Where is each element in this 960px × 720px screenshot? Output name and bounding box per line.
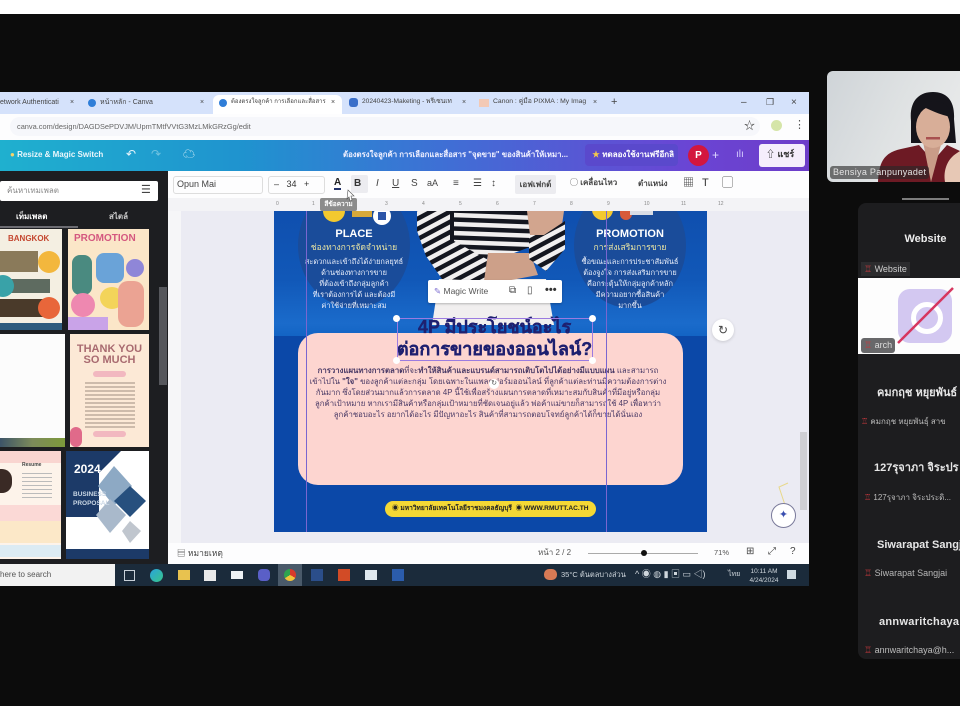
canva top bar [0, 140, 809, 171]
canva top bar: ⇧ แชร์ [766, 149, 794, 159]
top ruler: 3 [385, 201, 388, 207]
name tag: ♖ annwaritchaya@h... [864, 645, 954, 655]
assistant button [771, 503, 796, 528]
top ruler [168, 198, 809, 211]
text toolbar: – 34 + [274, 179, 309, 189]
sidebar: ☰ [141, 184, 151, 196]
promotion body: มีความอยากซื้อสินค้า [596, 290, 664, 299]
star: ☆ [744, 120, 755, 132]
text toolbar: B [354, 178, 361, 189]
text toolbar: ≡ [453, 178, 459, 189]
browser window [0, 92, 809, 586]
try free [585, 144, 678, 166]
body text: เข้าไปใน "ใจ" ของลูกค้าแต่ละกลุ่ม โดยเฉพาะในแพลตฟอร์มออนไลน์ ที่ลูกค้าแต่ละท่านมีความต้องการต่าง [310, 377, 666, 386]
clock [750, 568, 778, 584]
active chrome [278, 564, 302, 586]
thumb: promotion: PROMOTION [74, 233, 136, 244]
place body: ค่าใช้จ่ายที่เหมาะสม [321, 301, 387, 310]
top ruler: 5 [459, 201, 462, 207]
thumb: resume: Resume [22, 462, 41, 468]
name tag: ♖ คมกฤช หยุยพันธุ์ สาข [861, 417, 946, 426]
promotion body [582, 256, 678, 310]
tooltip: สีข้อความ [324, 201, 353, 208]
mouse cursor [346, 190, 355, 202]
footer pill [385, 501, 596, 517]
notification [787, 570, 796, 579]
name tag: ♖ Siwarapat Sangjai [864, 568, 947, 578]
tab icons [88, 99, 96, 107]
tab titles: × [791, 97, 797, 108]
tab titles: × [70, 99, 74, 106]
footer bar [168, 543, 809, 564]
participant: search tile [858, 278, 960, 354]
body text: การวางแผนทางการตลาดที่จะทำให้สินค้าและแบรนด์สามารถเติบโตไปได้อย่างมีแบบแผน และสามารถ [318, 366, 658, 375]
promotion body: ซื้อขณะและการประชาสัมพันธ์ [582, 257, 678, 266]
promotion body: ต้องจูงใจ การส่งเสริมการขาย [583, 268, 677, 277]
upper gradient [274, 211, 707, 336]
search box [0, 181, 158, 201]
participant: website [861, 233, 946, 276]
footer text: ◉ มหาวิทยาลัยเทคโนโลยีราชมงคลธัญบุรี ◉ WWW.RMUTT.AC.TH [392, 505, 588, 512]
taskbar: 35°C ต้นตลบางส่วน [561, 570, 626, 579]
participant: kamonkrit: คมกฤช หยุยพันธ์ [877, 387, 957, 399]
title: ต่อการขายของออนไลน์? [397, 338, 592, 358]
title [397, 316, 592, 358]
tab titles: × [331, 99, 335, 106]
selection guides [306, 211, 607, 532]
canva top bar: + [712, 148, 719, 162]
top ruler: 12 [718, 201, 724, 207]
thumb: resume [0, 451, 61, 559]
text toolbar: T [702, 177, 709, 189]
selection handles [393, 315, 400, 322]
magic write toolbar: ••• [545, 284, 557, 296]
taskbar apps [124, 570, 135, 581]
place body: ที่เราต้องการได้ และต้องมี [313, 290, 395, 299]
place body: ที่ต้องเข้าถึงกลุ่มลูกค้า [319, 279, 389, 288]
place heading: PLACE [335, 228, 373, 240]
animate button: ◯ เคลื่อนไหว [570, 178, 617, 187]
thumb: 2024 business proposal: 2024 [74, 462, 101, 476]
name tag: ♖ 127รุจาภา จิระประดิ... [864, 493, 951, 502]
share button [759, 144, 805, 167]
panel: promotion [574, 211, 686, 310]
text toolbar [168, 171, 809, 198]
page scrollbar [800, 432, 807, 510]
tab titles: ❐ [766, 97, 774, 107]
refresh button [712, 319, 734, 341]
panel: place [298, 211, 410, 310]
speaker figure [878, 92, 960, 182]
tab titles: × [593, 99, 597, 106]
tab titles: Canon : คู่มือ PIXMA : My Imag [493, 98, 586, 105]
footer icons: ⊞ [746, 546, 754, 557]
url pill [10, 117, 760, 136]
place body: ด้านช่องทางการขาย [321, 268, 387, 277]
page count: หน้า 2 / 2 [538, 548, 571, 557]
promotion heading: PROMOTION [596, 228, 664, 240]
participant: rujapa [864, 462, 959, 502]
search box [0, 564, 115, 586]
clock: 4/24/2024 [750, 577, 778, 584]
tab titles: + [611, 96, 617, 108]
participant: annwaritchaya [864, 616, 960, 655]
document title: ต้องตรงใจลูกค้า การเลือกและสื่อสาร "จุดขาย" ของสินค้าให้เหมา... [343, 150, 568, 159]
effects button: เอฟเฟกต์ [520, 180, 551, 189]
zoom slider [588, 553, 698, 554]
sidebar: ค้นหาเทมเพลต [7, 186, 59, 195]
thumb: thank you: SO MUCH [84, 354, 135, 366]
drag handle [902, 198, 949, 200]
refresh button: ↻ [718, 323, 728, 337]
top ruler: 11 [681, 201, 686, 207]
sidebar: สไตล์ [109, 212, 128, 221]
promotion circle [574, 183, 686, 308]
sidebar collapse handle [168, 347, 174, 387]
text toolbar: U [392, 178, 399, 189]
thumb: 2024 business proposal [66, 451, 149, 559]
weather [544, 569, 557, 580]
transparency paint lock: ▦ [683, 177, 694, 189]
design page [274, 211, 707, 532]
zoom value: 71% [714, 548, 729, 557]
body text: ลูกค้าเป้าหมาย หากเรามีสินค้าหรือกลุ่มเป้าหมายที่ชัดเจนอยู่แล้ว พ่อค้าแม่ขายก็สามารถใช้ 4P เพื่อหาว่า [315, 399, 661, 408]
system tray: ^ ◉ ◍ ▮ ▣ ▭ ◁) [635, 569, 706, 579]
top ruler: 2 [348, 201, 351, 207]
top ruler: 0 [276, 201, 279, 207]
top ruler: 1 [312, 201, 315, 207]
tab underline [0, 226, 78, 228]
tab titles: – [741, 97, 747, 108]
effects button [515, 175, 556, 194]
profile icon [771, 120, 782, 131]
tab titles: etwork Authenticati [0, 99, 59, 106]
rotate handle: ↻ [491, 380, 497, 387]
letterbox bottom [0, 706, 960, 720]
text toolbar: ☰ [473, 178, 482, 189]
thumb: bangkok [0, 229, 62, 330]
participant: website: Website [904, 233, 946, 245]
undo redo: ↶ [126, 147, 136, 161]
top ruler: 10 [644, 201, 650, 207]
magic write toolbar: ▯ [527, 285, 533, 296]
body text [310, 365, 666, 420]
tab bar [0, 92, 809, 114]
top ruler: 9 [607, 201, 610, 207]
top ruler: 4 [422, 201, 425, 207]
assistant button: ✦ [779, 509, 788, 521]
canva top bar: ↷ [151, 147, 161, 161]
speaker name label: Bensiya Panpunyadet [833, 167, 926, 177]
url text: canva.com/design/DAGDSePDVJM/UpmTMtfVVtG3MzLMkGRzGg/edit [17, 122, 251, 131]
place subheading: ช่องทางการจัดจำหน่าย [311, 242, 397, 252]
top ruler: 8 [570, 201, 573, 207]
text toolbar: ↕ [491, 178, 496, 189]
text toolbar: S [411, 178, 418, 189]
menu dots: ⋮ [794, 119, 805, 131]
notes: ▤ หมายเหตุ [177, 548, 223, 558]
text toolbar: Opun Mai [177, 179, 216, 189]
promotion subheading: การส่งเสริมการขาย [594, 242, 666, 252]
name tag [861, 262, 910, 276]
thumb: bangkok: BANGKOK [8, 234, 49, 243]
promotion icons [592, 199, 613, 220]
canva top bar: ★ ทดลองใช้งานฟรีอีกลิ [592, 150, 674, 159]
body text: ลูกค้าชอบอะไร อยากได้อะไร มีปัญหาอะไร สินค้าที่สามารถตอบโจทย์ลูกค้าได้ก็ขายได้นั่นเอง [334, 410, 642, 419]
letterbox top [0, 0, 960, 14]
title: 4P มีประโยชน์อะไร [418, 317, 571, 337]
canva top bar: ☁ [183, 147, 195, 161]
tabs: เท็มเพลต [16, 212, 47, 221]
promotion body: คือกระตุ้นให้กลุ่มลูกค้าหลัก [587, 279, 673, 288]
format icons: A [334, 177, 341, 188]
tooltip [320, 198, 357, 211]
resize button: ● Resize & Magic Switch [10, 150, 103, 159]
panel: pink text box [298, 333, 683, 485]
font size [268, 176, 325, 194]
address bar [0, 114, 809, 140]
body text: กันมาก ซึ่งโดยส่วนมากแล้วการตลาด 4P นี้ใช้เพื่อสร้างแผนการตลาดที่เหมาะสมกับสินค้าที่มีอยู่หรือกลุ่ม [316, 388, 660, 397]
top ruler: 7 [533, 201, 536, 207]
place icons [323, 200, 345, 222]
font select [173, 176, 263, 194]
participant: annwaritchaya: annwaritchaya [879, 616, 959, 628]
selection box [397, 318, 593, 361]
place circle [298, 183, 410, 308]
tab titles: × [462, 99, 466, 106]
active tab [213, 95, 342, 114]
yellow pen mark [778, 482, 788, 504]
rotate handle [489, 379, 499, 389]
avatar: P [695, 150, 702, 161]
name tag [861, 338, 895, 353]
tab titles: ต้องตรงใจลูกค้า การเลือกและสื่อสาร [231, 99, 326, 105]
taskbar: here to search [0, 570, 51, 579]
tab titles [0, 96, 797, 108]
promotion body: มากขึ้น [618, 301, 642, 310]
place body [305, 257, 403, 310]
participant: rujapa: 127รุจาภา จิระปร [874, 462, 959, 474]
participant: kamonkrit [861, 386, 957, 426]
participant: siwarapat [864, 539, 960, 578]
thumb: white paper [0, 334, 65, 447]
taskbar: ไทย [728, 571, 740, 578]
taskbar [0, 564, 809, 586]
left ruler [168, 211, 181, 546]
magic write toolbar [428, 280, 562, 303]
text toolbar: I [376, 178, 379, 189]
thumb: thank you [70, 334, 149, 447]
sidebar [0, 171, 168, 564]
top ruler: 6 [496, 201, 499, 207]
sidebar scrollbar [159, 287, 167, 385]
clock: 10:11 AM [750, 568, 777, 575]
tab titles: 20240423-Maketing - พรีเซนเท [362, 98, 452, 105]
thumb: thank you: THANK YOU [77, 343, 142, 355]
thumb: 2024 business proposal: PROPOSAL [73, 500, 109, 507]
name tag: ♖ arch [864, 340, 892, 350]
text toolbar: ▢ [722, 177, 733, 189]
participant: siwarapat: Siwarapat Sangj [877, 539, 960, 551]
actions: ⧉ [509, 285, 516, 296]
tab titles: × [200, 99, 204, 106]
participant panel [858, 203, 960, 659]
speaker video tile [827, 71, 960, 182]
avatar [688, 145, 709, 166]
position button: ตำแหน่ง [638, 179, 668, 188]
purple app icon [898, 289, 952, 343]
text toolbar: aA [427, 178, 438, 188]
tab titles: หน้าหลัก - Canva [100, 99, 153, 106]
footer bar: ⤢ [768, 546, 776, 557]
person in striped top [417, 211, 565, 325]
red slash [897, 287, 954, 344]
thumb: 2024 business proposal: BUSINESS [73, 491, 106, 498]
thumb: promotion [68, 229, 149, 330]
place body: สะดวกและเข้าถึงได้ง่ายกลยุทธ์ [305, 257, 403, 266]
footer bar: ? [790, 546, 796, 557]
chart icon: ılı [736, 149, 744, 160]
magic write label: ✎ Magic Write [434, 286, 488, 296]
name tag: ♖ Website [864, 264, 907, 274]
